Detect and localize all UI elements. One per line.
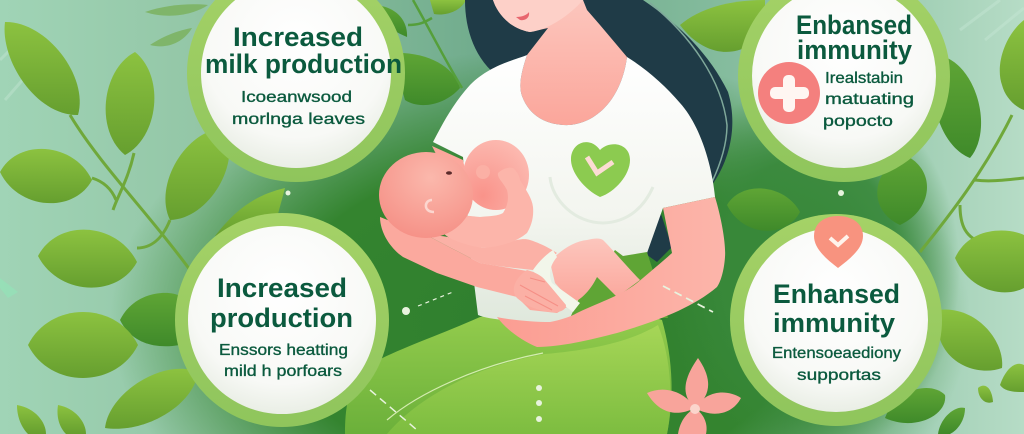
description: Enssors heatting	[219, 342, 348, 359]
finger lines	[520, 278, 558, 310]
description: Irealstabin	[825, 70, 903, 87]
icon: plus badge	[758, 62, 820, 124]
mother right arm	[497, 197, 725, 347]
near thigh	[387, 325, 670, 434]
mother left hand	[514, 270, 566, 312]
heading: immunity	[773, 308, 895, 338]
description	[823, 70, 914, 130]
shirt	[433, 55, 715, 322]
right moringa foliage	[727, 20, 1024, 434]
heading	[773, 279, 900, 338]
panel: enhanced immunity top	[738, 0, 950, 182]
baby arm	[443, 168, 533, 248]
baby torso	[430, 236, 557, 270]
description: supportas	[797, 367, 881, 384]
mother and baby figure	[345, 0, 732, 434]
baby ear	[426, 200, 434, 212]
panel: enhanced immunity bottom	[730, 214, 942, 426]
mouth	[516, 12, 529, 20]
thigh highlight	[387, 353, 543, 420]
panel: increased production	[175, 213, 389, 427]
icon: heart on shirt	[571, 142, 630, 197]
description: mild h porfoars	[224, 363, 342, 380]
diaper	[533, 250, 580, 312]
heading: Increased	[217, 273, 347, 303]
description	[232, 89, 365, 128]
icon: heart badge	[814, 216, 863, 268]
description	[772, 345, 901, 384]
baby head	[379, 152, 473, 238]
description: matuating	[825, 91, 914, 108]
heading: Enbansed	[796, 10, 912, 40]
sleeve skin	[432, 146, 465, 170]
connector dots	[286, 190, 844, 430]
central foliage	[372, 0, 765, 434]
description: popocto	[823, 113, 893, 130]
face	[493, 0, 583, 32]
heading: production	[210, 303, 353, 333]
hair highlight	[650, 3, 727, 182]
baby leg	[550, 238, 640, 303]
description	[219, 342, 348, 380]
neck and chest	[493, 0, 627, 125]
mother left arm	[380, 217, 567, 313]
heading	[796, 10, 912, 65]
bust shading	[550, 177, 653, 223]
description: morlnga leaves	[232, 111, 365, 128]
heading: Enhansed	[773, 279, 900, 309]
breast	[463, 140, 529, 210]
nipple	[476, 165, 490, 179]
left moringa foliage	[0, 0, 466, 434]
description: Icoeanwsood	[241, 89, 352, 106]
description: Entensoeaediony	[772, 345, 901, 362]
baby eye	[446, 171, 452, 175]
heading	[210, 273, 353, 333]
hair	[465, 0, 732, 262]
heading: milk production	[205, 49, 402, 79]
heading	[205, 22, 402, 79]
waistband green	[570, 250, 668, 318]
pants	[345, 300, 672, 434]
heading: Increased	[233, 22, 363, 52]
panel: increased milk production	[187, 0, 405, 182]
flower	[647, 358, 741, 434]
heading: immunity	[797, 35, 912, 65]
